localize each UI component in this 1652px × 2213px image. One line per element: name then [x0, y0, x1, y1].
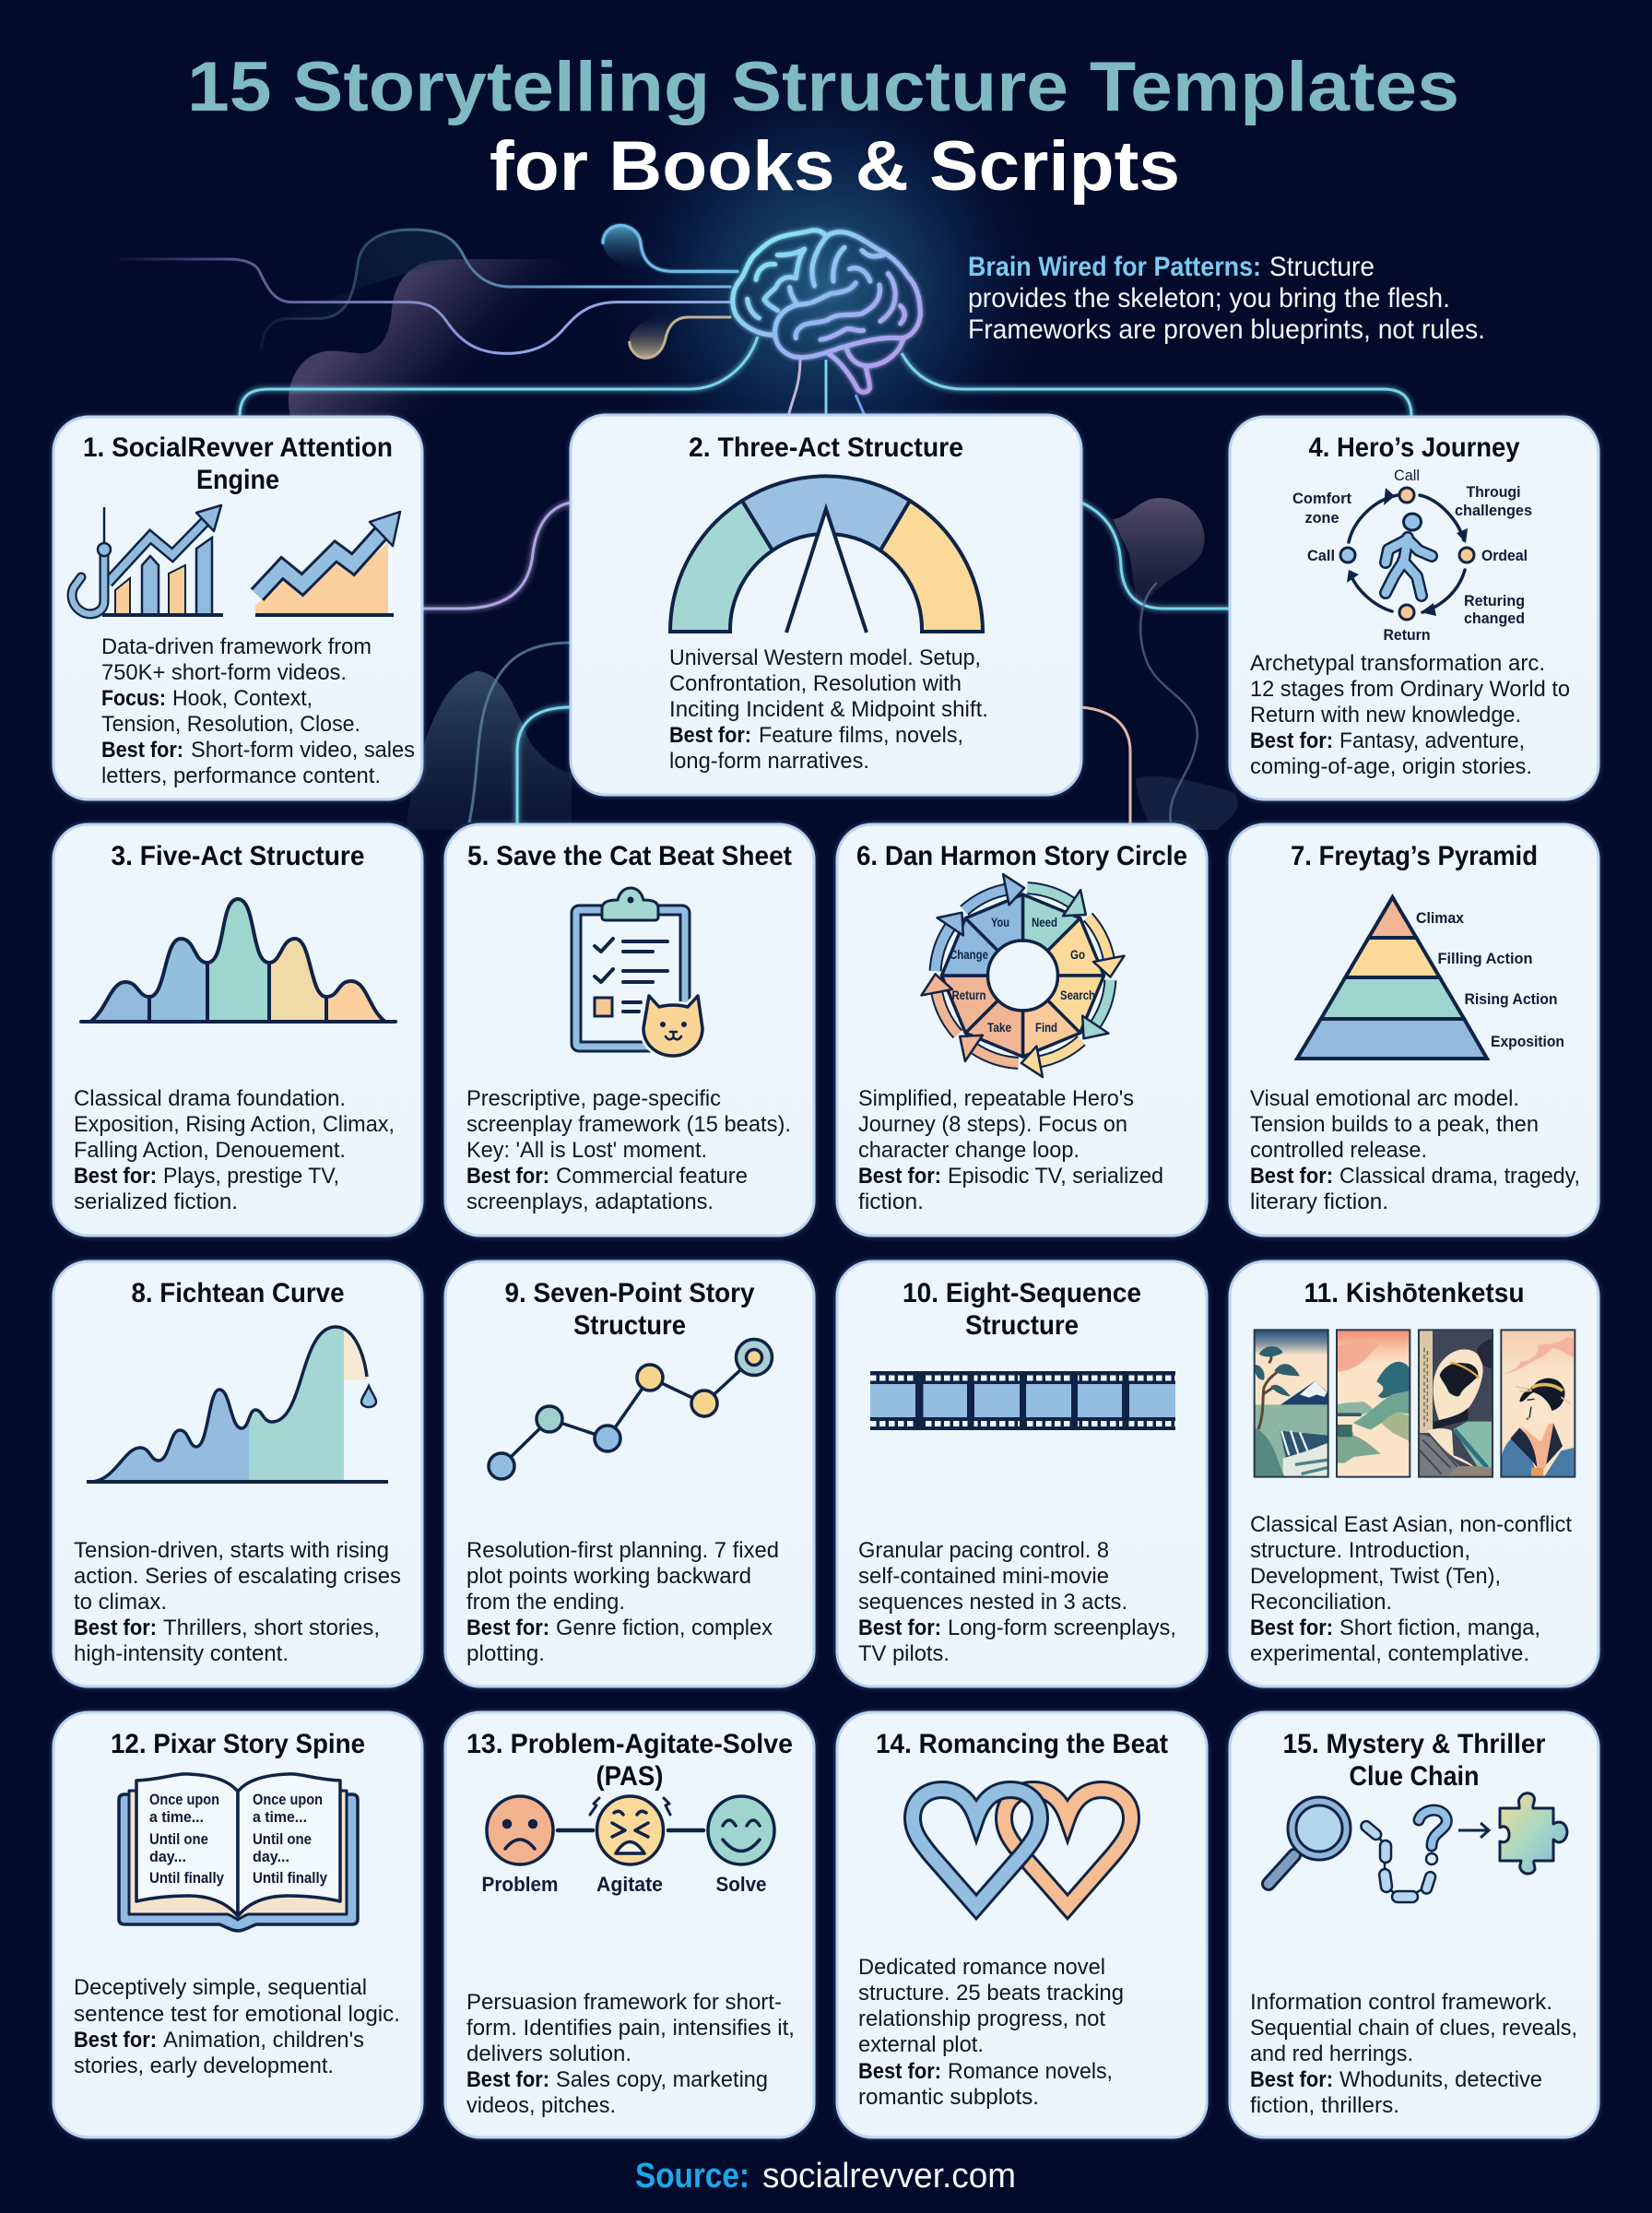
description: Long-form screenplays,	[948, 1615, 1176, 1640]
icon: clue chain	[1359, 1819, 1436, 1902]
heading	[1283, 1729, 1546, 1792]
icon labels: Call	[1307, 547, 1335, 564]
icon: woodblock figure with mirror	[1419, 1330, 1493, 1477]
icon: woodblock landscape with mountain	[1255, 1330, 1328, 1477]
description: Deceptively simple, sequential	[74, 1975, 367, 2000]
panel: 9 Seven-Point Story Structure	[445, 1261, 814, 1686]
icon: story circle wheel: Find	[1035, 1020, 1057, 1035]
description: romantic subplots.	[858, 2085, 1039, 2110]
panel: 5 Save the Cat Beat Sheet	[445, 824, 814, 1236]
description	[1250, 1512, 1572, 1666]
description: Exposition, Rising Action, Climax,	[74, 1112, 395, 1137]
description: external plot.	[858, 2032, 984, 2057]
description: Best for:	[1250, 2067, 1333, 2092]
description: and red herrings.	[1250, 2041, 1413, 2066]
icon: film strip	[870, 1371, 1175, 1430]
description: from the ending.	[466, 1590, 625, 1615]
description: Inciting Incident & Midpoint shift.	[669, 697, 988, 722]
heading: (PAS)	[596, 1761, 664, 1792]
description: Hook, Context,	[172, 686, 313, 711]
icon: brain	[733, 231, 920, 392]
panel: 2 Three-Act Structure	[571, 415, 1081, 795]
description	[1250, 1990, 1577, 2118]
description: Episodic TV, serialized	[948, 1164, 1163, 1189]
description	[1250, 1086, 1580, 1214]
description: Sales copy, marketing	[556, 2067, 768, 2092]
description: self-contained mini-movie	[858, 1564, 1109, 1589]
icon: plot points	[489, 1339, 773, 1479]
face labels: Agitate	[596, 1873, 663, 1896]
pyramid labels	[1416, 909, 1564, 1050]
pyramid labels: Exposition	[1491, 1033, 1564, 1050]
description	[858, 1955, 1124, 2110]
panel: 7 Freytag's Pyramid	[1230, 824, 1599, 1236]
intro text: provides the skeleton; you bring the flesh.	[968, 283, 1450, 314]
description	[74, 1975, 400, 2078]
description: 750K+ short-form videos.	[101, 660, 347, 685]
description: Best for:	[669, 723, 751, 748]
heading: Structure	[965, 1310, 1079, 1341]
icon labels: Througi	[1466, 483, 1521, 501]
icon: clipboard with cat	[572, 888, 702, 1056]
description: Best for:	[858, 1615, 941, 1640]
icon: woodblock portrait	[1501, 1330, 1575, 1477]
description: serialized fiction.	[74, 1189, 238, 1214]
pyramid labels: Rising Action	[1464, 990, 1558, 1008]
panel: 15 Mystery & Thriller Clue Chain	[1230, 1712, 1599, 2137]
description: fiction.	[858, 1189, 924, 1214]
heading: 5. Save the Cat Beat Sheet	[467, 841, 792, 871]
title: 15 Storytelling Structure Templates	[187, 48, 1459, 126]
icon labels: Ordeal	[1481, 547, 1528, 564]
heading: 9. Seven-Point Story	[505, 1278, 755, 1308]
icon: story circle wheel: Return	[951, 988, 986, 1002]
icon: question mark	[1419, 1810, 1446, 1864]
description: Feature films, novels,	[759, 723, 963, 748]
icon labels: challenges	[1455, 502, 1532, 519]
description: plotting.	[466, 1641, 545, 1666]
description: Thrillers, short stories,	[163, 1615, 380, 1640]
description: Best for:	[74, 1164, 157, 1189]
description: Dedicated romance novel	[858, 1955, 1105, 1980]
description: structure. Introduction,	[1250, 1538, 1470, 1563]
heading: 1. SocialRevver Attention	[83, 432, 393, 463]
panel: 3 Five-Act Structure	[53, 824, 422, 1236]
description: Classical East Asian, non-conflict	[1250, 1512, 1572, 1537]
description: controlled release.	[1250, 1138, 1427, 1163]
panel: 10 Eight-Sequence Structure	[837, 1261, 1207, 1686]
description: Whodunits, detective	[1339, 2067, 1542, 2092]
book text: Once upon	[149, 1791, 219, 1808]
description: Falling Action, Denouement.	[74, 1138, 346, 1163]
description: Short fiction, manga,	[1339, 1615, 1540, 1640]
description: relationship progress, not	[858, 2006, 1105, 2031]
description	[858, 1538, 1176, 1666]
icon labels: changed	[1464, 609, 1525, 627]
icon: pyramid	[1297, 897, 1487, 1059]
heading: 10. Eight-Sequence	[903, 1278, 1141, 1308]
description: high-intensity content.	[74, 1641, 289, 1666]
description: Best for:	[1250, 1164, 1333, 1189]
icon: arrow	[1458, 1823, 1489, 1838]
description: Focus:	[101, 686, 166, 711]
description: screenplays, adaptations.	[466, 1189, 714, 1214]
icon: story circle wheel: Search	[1060, 988, 1095, 1002]
title	[187, 48, 1459, 206]
heading: 14. Romancing the Beat	[876, 1729, 1168, 1759]
description: TV pilots.	[858, 1641, 950, 1666]
description: stories, early development.	[74, 2053, 334, 2078]
description	[858, 1086, 1163, 1214]
description: delivers solution.	[466, 2041, 631, 2066]
description	[74, 1538, 401, 1666]
book text: day...	[149, 1848, 186, 1865]
description: Key: 'All is Lost' moment.	[466, 1138, 707, 1163]
face labels: Solve	[715, 1873, 767, 1896]
icon: puzzle piece	[1500, 1793, 1567, 1874]
intro text: Structure	[1269, 252, 1375, 282]
description: character change loop.	[858, 1138, 1080, 1163]
icon: open book	[119, 1774, 358, 1931]
description: Granular pacing control. 8	[858, 1538, 1109, 1563]
description: 12 stages from Ordinary World to	[1250, 677, 1570, 702]
description: Archetypal transformation arc.	[1250, 651, 1545, 676]
heading	[466, 1729, 793, 1792]
description	[101, 634, 415, 788]
description: Simplified, repeatable Hero's	[858, 1086, 1134, 1111]
icon: woodblock river landscape	[1337, 1330, 1410, 1477]
description: Commercial feature	[556, 1164, 748, 1189]
description: Genre fiction, complex	[556, 1615, 773, 1640]
face labels	[481, 1873, 767, 1896]
panel: 6 Dan Harmon Story Circle	[837, 824, 1207, 1236]
description: Best for:	[1250, 1615, 1333, 1640]
description: Plays, prestige TV,	[163, 1164, 339, 1189]
description: Confrontation, Resolution with	[669, 671, 962, 696]
icon labels	[1292, 467, 1532, 644]
heading: 13. Problem-Agitate-Solve	[466, 1729, 793, 1759]
icon: problem agitate solve faces	[487, 1796, 774, 1864]
icon: three-act gauge	[670, 476, 983, 633]
description: Universal Western model. Setup,	[669, 645, 981, 670]
description: Best for:	[74, 1615, 157, 1640]
icon: hero journey cycle	[1292, 467, 1532, 644]
description: Romance novels,	[948, 2059, 1113, 2084]
panel: 1 SocialRevver Attention Engine	[53, 417, 422, 799]
heading: Structure	[573, 1310, 686, 1341]
book text: Until one	[149, 1830, 208, 1848]
background blobs	[277, 225, 1238, 830]
icon labels: zone	[1305, 509, 1339, 527]
heading	[505, 1278, 755, 1341]
panel: 8 Fichtean Curve	[53, 1261, 422, 1686]
panel: 11 Kishōtenketsu	[1230, 1261, 1599, 1686]
icon labels: Return	[1383, 626, 1431, 644]
description: Resolution-first planning. 7 fixed	[466, 1538, 779, 1563]
pyramid labels: Climax	[1416, 909, 1465, 927]
description: Best for:	[74, 2028, 157, 2053]
book text: Until one	[253, 1830, 312, 1848]
description: Persuasion framework for short-	[466, 1990, 782, 2015]
intro text	[968, 252, 1485, 345]
description: fiction, thrillers.	[1250, 2093, 1399, 2118]
book text: day...	[253, 1848, 289, 1865]
source footer: Source:	[635, 2157, 749, 2195]
icon: story circle wheel: Change	[950, 947, 988, 962]
description: sentence test for emotional logic.	[74, 2002, 400, 2027]
panel: 4 Hero's Journey	[1230, 417, 1599, 799]
heading: 7. Freytag’s Pyramid	[1291, 841, 1538, 871]
icon: five-act peaks	[81, 899, 395, 1022]
description: Fantasy, adventure,	[1339, 728, 1525, 753]
intro text: Frameworks are proven blueprints, not rules.	[968, 314, 1485, 345]
icon: fichtean curve	[87, 1327, 388, 1482]
description: Data-driven framework from	[101, 634, 372, 659]
icon labels: Comfort	[1292, 490, 1351, 507]
panel: 13 Problem-Agitate-Solve	[445, 1712, 814, 2137]
description	[466, 1086, 791, 1214]
description: Classical drama, tragedy,	[1339, 1164, 1580, 1189]
description	[669, 645, 988, 774]
description	[1250, 651, 1570, 779]
icon: magnifier	[1268, 1797, 1351, 1884]
icon: interlocked hearts	[913, 1790, 1131, 1907]
book text	[149, 1791, 327, 1887]
heading: 15. Mystery & Thriller	[1283, 1729, 1546, 1759]
heading: Engine	[196, 465, 279, 495]
description: Animation, children's	[163, 2028, 364, 2053]
description: action. Series of escalating crises	[74, 1564, 401, 1589]
description: Best for:	[466, 1615, 549, 1640]
icon: rising area chart	[255, 512, 400, 615]
icon: hook and bar chart	[72, 505, 223, 615]
description: letters, performance content.	[101, 763, 381, 788]
title: for Books & Scripts	[490, 127, 1180, 206]
description: structure. 25 beats tracking	[858, 1981, 1124, 2006]
description: Best for:	[466, 2067, 549, 2092]
description: Journey (8 steps). Focus on	[858, 1112, 1127, 1137]
icon: story circle wheel	[918, 870, 1127, 1081]
panel: 14 Romancing the Beat	[837, 1712, 1207, 2137]
description: Tension builds to a peak, then	[1250, 1112, 1539, 1137]
description: screenplay framework (15 beats).	[466, 1112, 791, 1137]
description: Best for:	[466, 1164, 549, 1189]
heading: 12. Pixar Story Spine	[111, 1729, 365, 1759]
description: Reconciliation.	[1250, 1590, 1392, 1615]
description: form. Identifies pain, intensifies it,	[466, 2016, 795, 2041]
book text: a time...	[149, 1808, 204, 1826]
source footer	[635, 2157, 1016, 2195]
description: Best for:	[101, 738, 183, 763]
book text: Once upon	[253, 1791, 323, 1808]
description	[74, 1086, 395, 1214]
heading: 8. Fichtean Curve	[131, 1278, 345, 1308]
heading: 2. Three-Act Structure	[689, 432, 963, 463]
heading: 11. Kishōtenketsu	[1304, 1278, 1525, 1308]
description: Classical drama foundation.	[74, 1086, 346, 1111]
description: Visual emotional arc model.	[1250, 1086, 1519, 1111]
description: coming-of-age, origin stories.	[1250, 754, 1532, 779]
description: to climax.	[74, 1590, 167, 1615]
book text: a time...	[253, 1808, 307, 1826]
description: sequences nested in 3 acts.	[858, 1590, 1127, 1615]
description: Tension-driven, starts with rising	[74, 1538, 389, 1563]
pyramid labels: Filling Action	[1438, 950, 1532, 967]
description	[466, 1990, 795, 2118]
source footer: socialrevver.com	[762, 2157, 1016, 2195]
icon: story circle wheel: Need	[1032, 915, 1057, 929]
heading: 6. Dan Harmon Story Circle	[856, 841, 1187, 871]
description: long-form narratives.	[669, 749, 869, 774]
heading: Clue Chain	[1350, 1761, 1479, 1792]
description: Best for:	[858, 1164, 941, 1189]
description: Prescriptive, page-specific	[466, 1086, 721, 1111]
icon: story circle wheel: You	[991, 915, 1009, 929]
icon labels: Call	[1394, 467, 1420, 484]
book text: Until finally	[253, 1869, 327, 1887]
description: Development, Twist (Ten),	[1250, 1564, 1501, 1589]
description	[466, 1538, 779, 1666]
description: Best for:	[858, 2059, 941, 2084]
heading	[83, 432, 393, 495]
description: experimental, contemplative.	[1250, 1641, 1529, 1666]
intro text: Brain Wired for Patterns:	[968, 252, 1261, 282]
description: Return with new knowledge.	[1250, 703, 1521, 728]
icon labels: Returing	[1464, 592, 1525, 609]
face labels: Problem	[481, 1873, 559, 1896]
description: Short-form video, sales	[191, 738, 415, 763]
icon: story circle wheel: Go	[1070, 947, 1085, 962]
panel: 12 Pixar Story Spine	[53, 1712, 422, 2137]
description: Best for:	[1250, 728, 1333, 753]
description: Sequential chain of clues, reveals,	[1250, 2016, 1577, 2041]
description: literary fiction.	[1250, 1189, 1388, 1214]
heading	[903, 1278, 1141, 1341]
description: videos, pitches.	[466, 2093, 616, 2118]
description: Information control framework.	[1250, 1990, 1552, 2015]
book text: Until finally	[149, 1869, 224, 1887]
heading: 3. Five-Act Structure	[111, 841, 365, 871]
description: Tension, Resolution, Close.	[101, 712, 360, 737]
icon: story circle wheel: Take	[987, 1020, 1011, 1035]
description: plot points working backward	[466, 1564, 751, 1589]
connector lines	[113, 225, 1411, 824]
heading: 4. Hero’s Journey	[1309, 432, 1520, 463]
